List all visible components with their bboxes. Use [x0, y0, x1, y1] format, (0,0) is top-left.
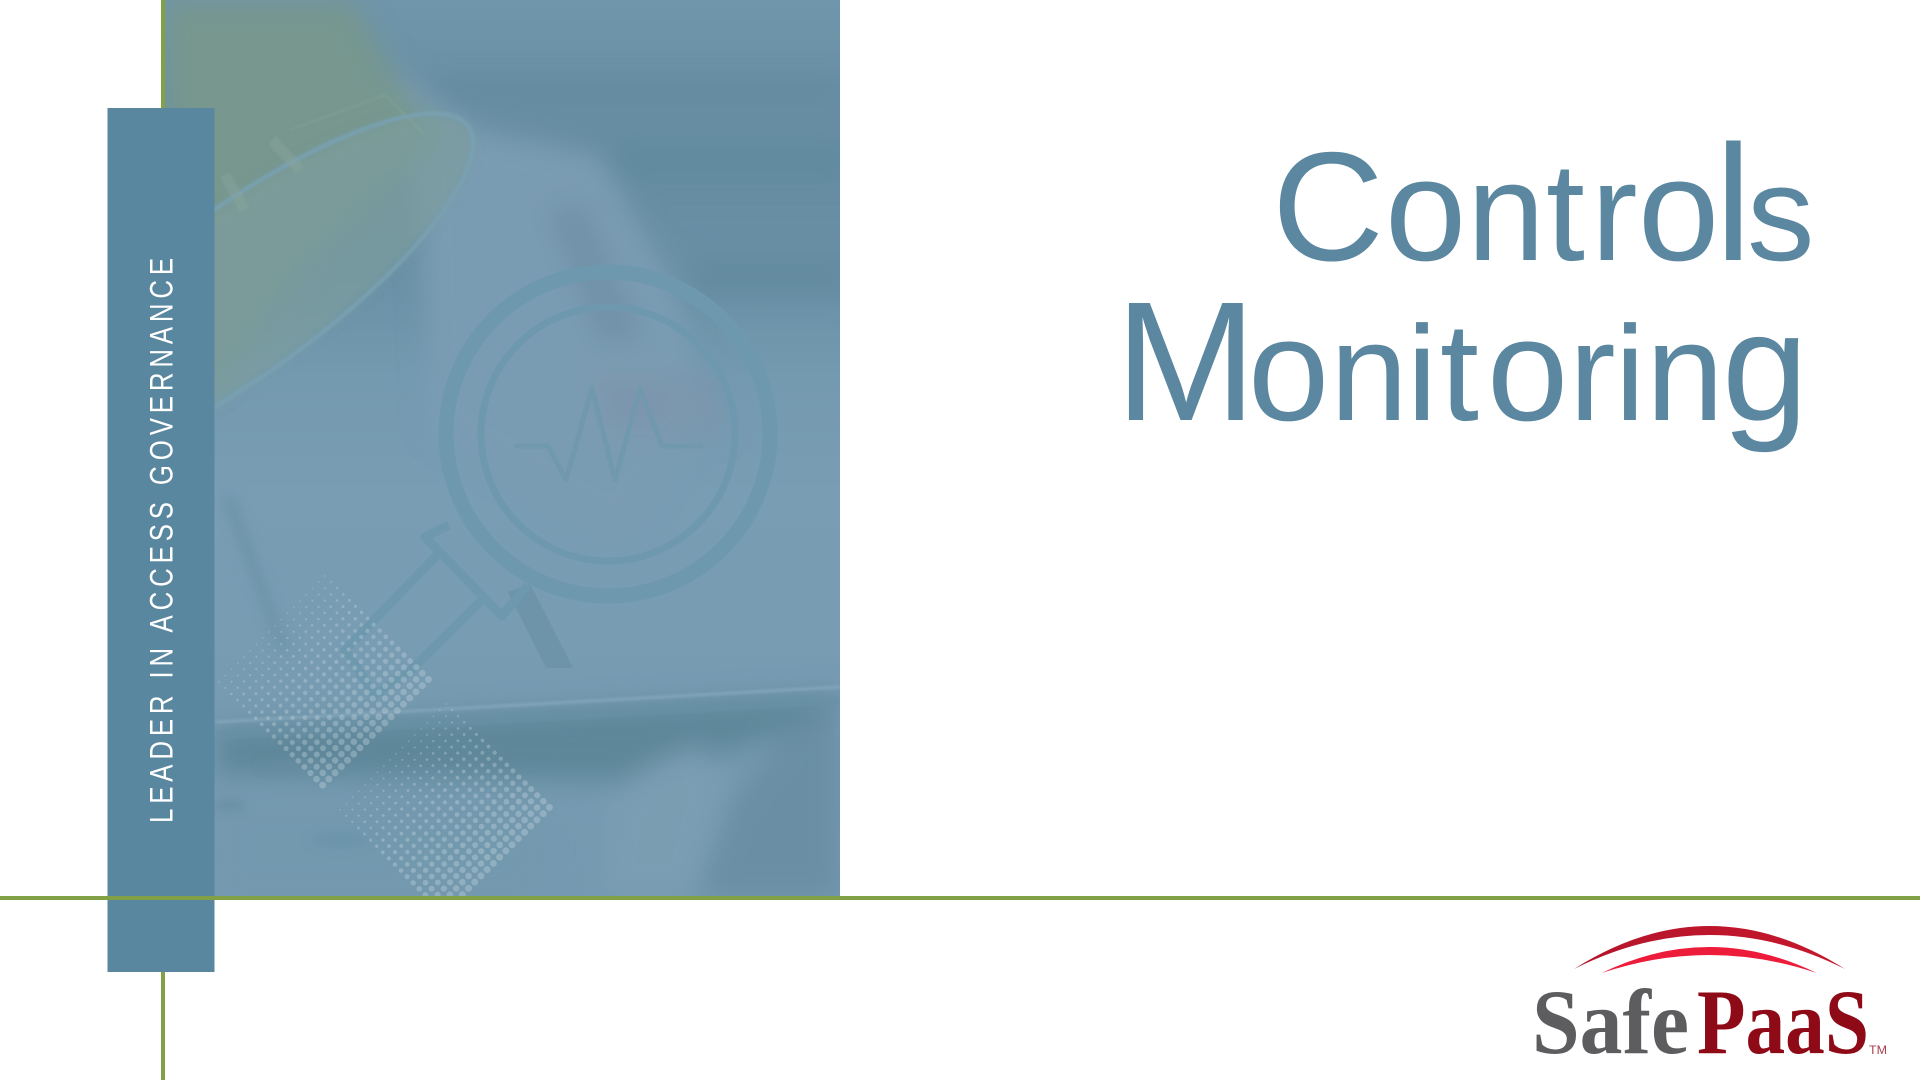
title line 1: l — [1715, 111, 1752, 295]
halftone diamond lower — [340, 703, 553, 896]
pencil shadow — [508, 584, 573, 668]
logo: SafePaaS — [1532, 926, 1887, 1073]
magnifier inner ring — [481, 307, 735, 561]
logo wordmark PaaS: PaaS — [1697, 971, 1869, 1073]
photo: blurred hand, watch and desk — [165, 0, 840, 892]
title line 1: C — [1272, 120, 1384, 293]
panel: vertical tagline bar — [108, 108, 214, 972]
title line 2: o — [1248, 288, 1329, 451]
logo outer arc — [1574, 926, 1845, 969]
title line 2: n — [1330, 293, 1408, 450]
title line 1: o — [1385, 128, 1466, 291]
title line 2: t — [1440, 293, 1479, 450]
halftone diamond upper — [213, 576, 428, 791]
tagline text: LEADER IN ACCESS GOVERNANCE — [144, 253, 180, 823]
title line 2: g — [1722, 280, 1808, 453]
magnifier outer ring — [446, 272, 770, 596]
title line 2: n — [1646, 293, 1724, 450]
magnifier handle — [345, 525, 528, 695]
title line 1: n — [1467, 133, 1545, 290]
title line 2: o — [1487, 288, 1568, 451]
logo inner arc — [1602, 947, 1817, 973]
title line 2: i — [1407, 298, 1437, 449]
logo wordmark Safe: Safe — [1532, 971, 1689, 1073]
title: Controls Monitoring — [1115, 111, 1814, 457]
logo trademark: TM — [1869, 1045, 1887, 1057]
title line 1: r — [1591, 133, 1638, 290]
heartbeat line — [516, 388, 701, 480]
title line 2: M — [1115, 267, 1257, 457]
title line 1: o — [1638, 128, 1719, 291]
title line 1: t — [1546, 133, 1585, 290]
panel: blurred photo background — [165, 0, 840, 896]
title line 1: s — [1747, 138, 1814, 289]
icon: magnifying glass with heartbeat — [345, 272, 770, 695]
title line 2: r — [1569, 293, 1616, 450]
title line 2: i — [1615, 298, 1645, 449]
